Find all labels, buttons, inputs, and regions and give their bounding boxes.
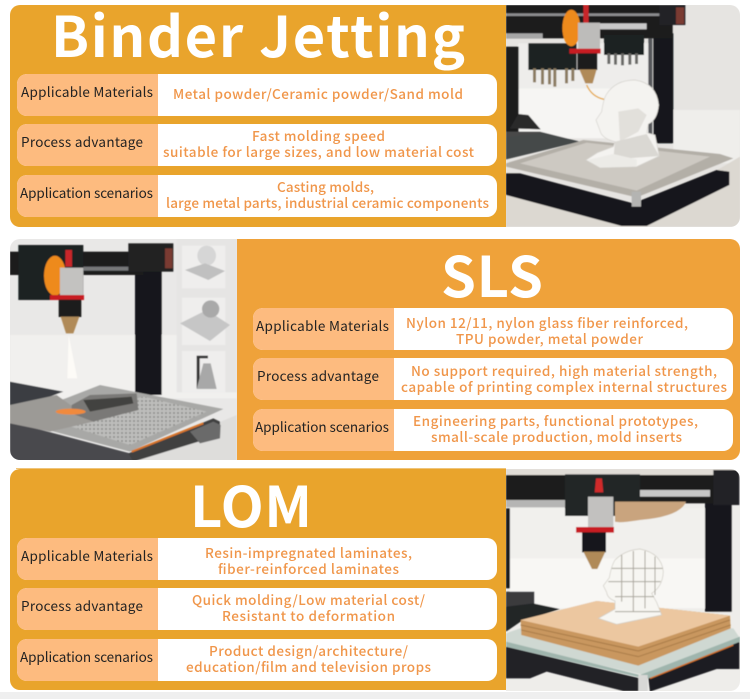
row: process advantage: Quick molding/Low material cost/: [192, 589, 425, 609]
image: SLS printer with laser on powder bed: [10, 239, 237, 462]
head model: [586, 80, 659, 168]
row: application scenarios: [253, 409, 733, 451]
row: application scenarios: small-scale production, mold inserts: [431, 426, 682, 446]
row: applicable materials: [253, 308, 733, 350]
left column: [506, 47, 519, 135]
row: application scenarios: Application scenarios: [20, 182, 153, 202]
row: applicable materials: TPU powder, metal powder: [456, 328, 643, 348]
spool and tool head: [562, 10, 580, 46]
image: LOM printer with laminated sheet stack: [506, 469, 740, 692]
printed part: [72, 393, 138, 422]
row: applicable materials: [17, 538, 497, 580]
printer bed: [10, 381, 64, 406]
tool head: [595, 478, 603, 492]
sand floor: [506, 157, 740, 227]
spool and tool head: [44, 256, 66, 296]
panel: Binder Jetting: [10, 0, 506, 227]
row: application scenarios: large metal parts, industrial ceramic components: [166, 192, 489, 212]
row: application scenarios: [17, 639, 497, 681]
row: applicable materials: Resin-impregnated laminates,: [205, 542, 412, 562]
row: process advantage: Fast molding speed: [252, 125, 385, 145]
row: process advantage: [17, 588, 497, 630]
row: application scenarios: Application scenarios: [20, 646, 153, 666]
printer base below glass: [506, 647, 640, 691]
title: SLS: SLS: [441, 233, 543, 314]
gantry: [10, 252, 143, 275]
row: process advantage: No support required, high material strength,: [411, 360, 717, 380]
row: process advantage: capable of printing complex internal structures: [401, 376, 727, 396]
row: applicable materials: Applicable Materials: [256, 315, 389, 335]
image: binder jetting printer with white head model: [506, 5, 740, 227]
panel: LOM: [10, 463, 506, 690]
title: LOM: LOM: [190, 463, 312, 544]
row: application scenarios: Casting molds,: [277, 176, 374, 196]
gantry: [506, 475, 719, 503]
row: process advantage: Process advantage: [257, 365, 379, 385]
column: [135, 265, 162, 395]
row: application scenarios: Product design/architecture/: [209, 640, 408, 660]
right column: [653, 33, 673, 143]
print head clusters: [528, 43, 577, 70]
row: process advantage: Process advantage: [21, 131, 143, 151]
row: applicable materials: Applicable Materials: [21, 81, 153, 101]
powder bed: [506, 140, 733, 197]
row: process advantage: [253, 358, 733, 400]
thumbnails: [182, 246, 225, 288]
printer base: [506, 170, 729, 226]
row: applicable materials: Applicable Materials: [21, 545, 153, 565]
row: application scenarios: Application scenarios: [255, 416, 389, 436]
gantry: [506, 5, 673, 38]
row: application scenarios: Engineering parts, functional prototypes,: [413, 410, 698, 430]
row: applicable materials: [17, 74, 497, 116]
row: applicable materials: fiber-reinforced laminates: [218, 558, 399, 578]
laser glow: [56, 409, 86, 415]
paper roll: [615, 502, 686, 522]
panel: SLS: [237, 233, 740, 460]
divider line under SLS: [16, 468, 506, 469]
row: application scenarios: [17, 175, 497, 217]
row: process advantage: [17, 124, 497, 166]
row: applicable materials: Metal powder/Ceramic powder/Sand mold: [173, 83, 463, 103]
bottom background strip: [0, 692, 750, 699]
row: application scenarios: education/film and television props: [186, 656, 431, 676]
row: process advantage: Process advantage: [21, 595, 143, 615]
laminate stack: [521, 601, 731, 666]
row: process advantage: suitable for large sizes, and low material cost: [163, 141, 475, 161]
head lattice model: [598, 549, 663, 624]
left column and right column: [506, 508, 510, 588]
glass plate: [506, 628, 740, 676]
row: process advantage: Resistant to deformation: [222, 605, 395, 625]
row: applicable materials: Nylon 12/11, nylon glass fiber reinforced,: [406, 312, 688, 332]
